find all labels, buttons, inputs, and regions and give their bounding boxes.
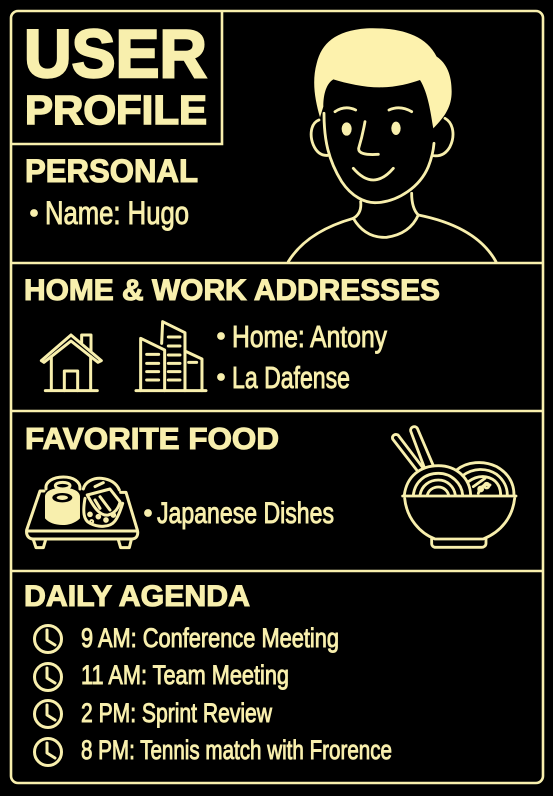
heading: favorite food: FAVORITE FOOD — [25, 421, 279, 456]
panel: daily agenda — [24, 580, 392, 766]
icon: house — [41, 335, 101, 391]
icon: clock — [34, 626, 62, 652]
heading: daily agenda: DAILY AGENDA — [24, 580, 250, 613]
text: work address — [217, 360, 350, 395]
agenda item: 9 AM: 9 AM: Conference Meeting — [81, 623, 339, 653]
text: japanese dishes: Japanese Dishes — [157, 497, 334, 530]
agenda item: 11 AM: 11 AM: Team Meeting — [81, 660, 289, 690]
title: USER — [24, 16, 207, 92]
agenda item: 8 PM — [34, 735, 392, 766]
agenda item: 11 AM — [34, 660, 289, 690]
text: home address: Home: Antony — [232, 319, 387, 354]
icon: sushi tray — [27, 477, 138, 548]
text: name: Name: Hugo — [45, 195, 189, 231]
agenda item: 2 PM: 2 PM: Sprint Review — [81, 698, 272, 728]
heading: personal: PERSONAL — [25, 153, 198, 189]
panel: personal — [25, 153, 198, 231]
icon: noodle bowl — [392, 427, 516, 547]
icon: man portrait — [288, 28, 496, 262]
agenda item: 2 PM — [34, 698, 272, 728]
heading: addresses: HOME & WORK ADDRESSES — [24, 274, 440, 307]
title: PROFILE — [25, 87, 207, 133]
panel: home and work addresses — [24, 274, 440, 395]
panel: favorite food — [25, 421, 516, 548]
text: work address: La Dafense — [232, 360, 350, 395]
agenda item: 8 PM: 8 PM: Tennis match with Frorence — [81, 735, 392, 765]
icon: clock — [34, 738, 62, 766]
icon: clock — [34, 700, 62, 728]
title — [24, 16, 207, 133]
icon: clock — [34, 664, 62, 690]
icon: office buildings — [136, 322, 206, 391]
